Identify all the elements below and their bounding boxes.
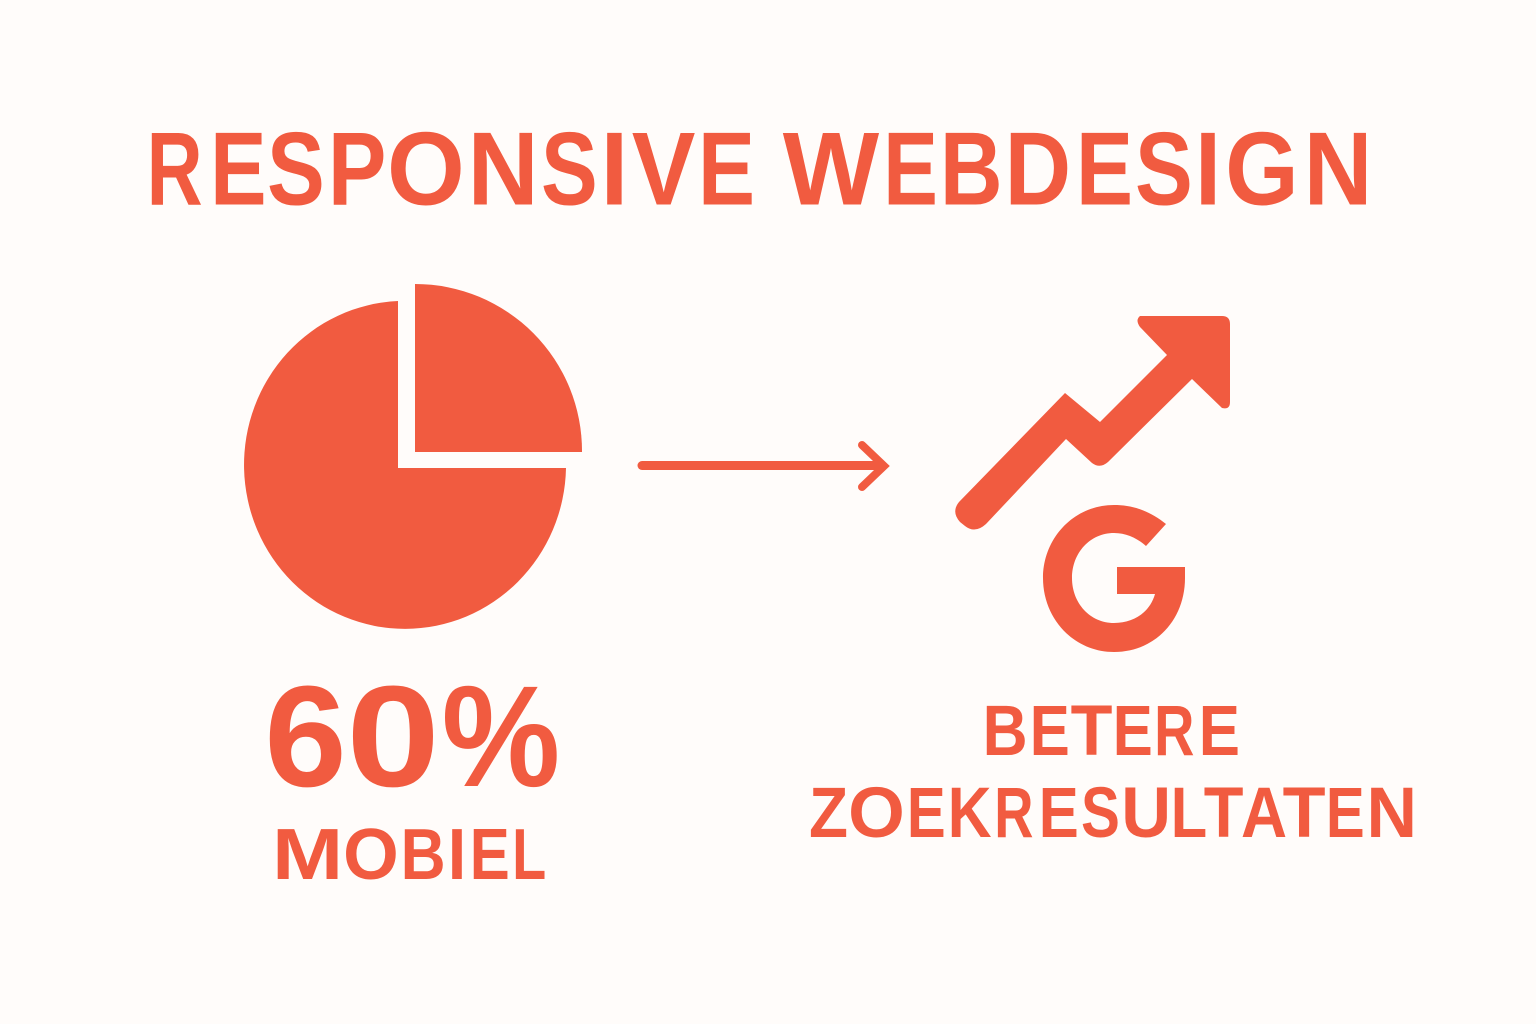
pie small segment <box>415 284 582 452</box>
title: G <box>1225 112 1299 228</box>
title: S <box>1135 112 1193 228</box>
title: E <box>1076 112 1133 228</box>
title: I <box>600 112 628 228</box>
title: S <box>267 112 325 228</box>
arrow <box>642 445 884 487</box>
title: N <box>468 112 539 228</box>
label: betere: T <box>1071 692 1112 771</box>
stat: 60%: % <box>442 656 560 817</box>
title: D <box>1005 112 1071 228</box>
label: zoekresultaten: E <box>907 774 946 853</box>
label: mobiel: E <box>470 815 510 895</box>
label: zoekresultaten: T <box>1204 774 1243 853</box>
icon: growth arrow <box>955 316 1230 530</box>
label: betere: E <box>1199 692 1240 771</box>
label: zoekresultaten: U <box>1121 774 1171 853</box>
title: B <box>940 112 1003 228</box>
label: zoekresultaten: K <box>948 774 992 853</box>
title: S <box>541 112 598 228</box>
title: O <box>387 112 465 228</box>
label: mobiel: I <box>448 815 466 895</box>
title: W <box>783 112 880 228</box>
title: E <box>698 112 755 228</box>
icon: G logo <box>1043 505 1185 652</box>
label: mobiel: L <box>512 815 546 895</box>
label: betere: B <box>983 692 1028 771</box>
title: E <box>210 112 266 228</box>
label: mobiel: B <box>401 815 446 895</box>
label: zoekresultaten: Z <box>809 774 848 853</box>
title: E <box>883 112 938 228</box>
label: zoekresultaten: R <box>994 774 1033 853</box>
label: zoekresultaten: S <box>1081 774 1120 853</box>
label: zoekresultaten: O <box>848 774 905 853</box>
label: mobiel: M <box>272 815 343 895</box>
title: N <box>1304 112 1372 228</box>
title: P <box>328 112 386 228</box>
label: zoekresultaten: N <box>1366 774 1417 853</box>
label: zoekresultaten: L <box>1171 774 1207 853</box>
label: zoekresultaten: E <box>1039 774 1079 853</box>
stat: 60%: 6 <box>264 656 347 817</box>
label: zoekresultaten: E <box>1326 774 1365 853</box>
label: betere: R <box>1154 692 1194 771</box>
title: I <box>1195 112 1221 228</box>
title: R <box>147 112 203 228</box>
label: betere: E <box>1113 692 1153 771</box>
stat: 60%: 0 <box>346 656 440 817</box>
title: V <box>632 112 696 228</box>
label: zoekresultaten: T <box>1283 774 1326 853</box>
pie chart <box>244 284 582 629</box>
label: zoekresultaten: A <box>1241 774 1287 853</box>
label: mobiel: O <box>343 815 399 895</box>
pie large segment: 60 percent <box>244 301 566 629</box>
label: betere: E <box>1030 692 1070 771</box>
